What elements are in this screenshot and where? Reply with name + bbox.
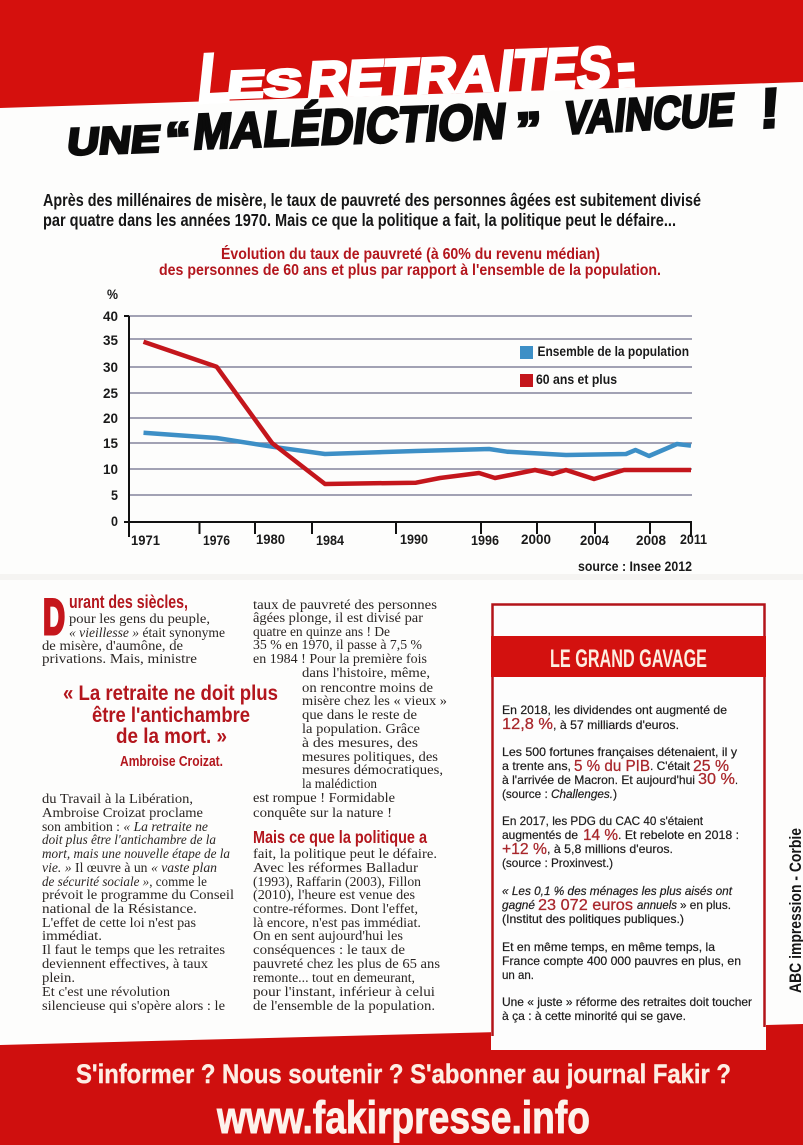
x axis labels	[131, 531, 707, 548]
x axis labels: 2000	[521, 531, 551, 547]
article left column, bottom: silencieuse qui s'opère alors : le	[42, 999, 225, 1014]
y axis labels: 15	[103, 435, 118, 451]
x axis labels: 1980	[256, 531, 285, 547]
article left column, bottom	[42, 792, 234, 1014]
pull quote	[63, 682, 278, 770]
article left column, bottom: Ambroise Croizat proclame	[42, 806, 203, 821]
title line 1	[194, 35, 640, 118]
article right column: contre-réformes. Dont l'effet,	[253, 902, 418, 917]
chart title	[159, 246, 661, 279]
article right column: misère chez les « vieux »	[302, 694, 447, 709]
article left column, top: « vieillesse » était synonyme	[69, 626, 225, 641]
closing paragraph: à ça : à cette minorité qui se gave.	[502, 1009, 686, 1023]
article left column, bottom: doit plus être l'antichambre de la	[42, 833, 216, 848]
article right column: en 1984 ! Pour la première fois	[253, 652, 427, 667]
fortunes paragraph: (source : Challenges.)	[502, 787, 617, 801]
fortunes paragraph: 25 %	[693, 758, 729, 775]
title line 1: RETRA	[305, 44, 500, 108]
article right column: la population. Grâce	[302, 722, 420, 737]
pull quote: « La retraite ne doit plus	[63, 682, 278, 705]
x axis labels: 2011	[680, 531, 707, 547]
article right column: mesures politiques, des	[302, 750, 438, 765]
pull quote: de la mort. »	[116, 725, 227, 748]
article left column, bottom: de sécurité sociale », comme le	[42, 875, 207, 890]
title line 1: :	[612, 47, 640, 97]
article left column, bottom: national de la Résistance.	[42, 902, 197, 917]
article left column, bottom: deviennent effectives, à taux	[42, 957, 208, 972]
y axis labels: 0	[111, 513, 118, 529]
CEO pay paragraph: augmentés de	[502, 828, 578, 842]
chart title: des personnes de 60 ans et plus par rapport à l'ensemble de la population.	[159, 262, 661, 279]
x axis labels: 1996	[471, 532, 499, 548]
footer website: www.fakirpresse.info	[216, 1092, 590, 1143]
y axis labels: 25	[103, 385, 118, 401]
article right column: (1993), Raffarin (2003), Fillon	[253, 875, 421, 890]
legend: Ensemble de la population	[538, 343, 689, 359]
x axis labels: 1984	[316, 532, 344, 548]
line chart	[103, 286, 707, 574]
article left column, bottom: prévoit le programme du Conseil	[42, 888, 234, 903]
article right column: pauvreté chez les plus de 65 ans	[253, 957, 440, 972]
article right column: 35 % en 1970, il passe à 7,5 %	[253, 638, 422, 653]
article right column: quatre en quinze ans ! De	[253, 625, 390, 640]
poverty paragraph: Et en même temps, en même temps, la	[502, 940, 715, 954]
top red banner	[0, 0, 803, 108]
richest households paragraph: 23 072 euros	[538, 897, 633, 914]
title line 1: ES	[225, 61, 304, 107]
richest households paragraph: « Les 0,1 % des ménages les plus aisés ont	[502, 884, 733, 898]
article left column, bottom: immédiat.	[42, 929, 102, 944]
title line 2: ”	[515, 102, 543, 155]
article left column, bottom: son ambition : « La retraite ne	[42, 820, 208, 835]
article left column, top	[42, 592, 225, 667]
chart title: Évolution du taux de pauvreté (à 60% du revenu médian)	[221, 246, 600, 263]
closing paragraph: Une « juste » réforme des retraites doit toucher	[502, 995, 752, 1009]
x axis labels: 2004	[580, 532, 609, 548]
dividends paragraph: 12,8 %	[502, 716, 553, 733]
blue line: ensemble de la population	[144, 433, 691, 456]
pull quote: être l'antichambre	[92, 704, 250, 727]
article right column: Avec les réformes Balladur	[253, 861, 418, 876]
richest households paragraph: (Institut des politiques publiques.)	[502, 912, 684, 926]
fortunes paragraph: 5 % du PIB	[574, 758, 650, 775]
article right column: taux de pauvreté des personnes	[253, 598, 437, 613]
fortunes paragraph: Les 500 fortunes françaises détenaient, il y	[502, 745, 737, 759]
title line 2: MALÉDICTION	[191, 92, 509, 160]
axes and ticks	[124, 316, 692, 537]
article right column: pour l'instant, inférieur à celui	[253, 985, 435, 1000]
poverty paragraph: un an.	[502, 968, 534, 982]
article left column, top: de misère, d'aumône, de	[42, 639, 183, 654]
article left column, bottom: du Travail à la Libération,	[42, 792, 193, 807]
intro text	[43, 190, 701, 230]
intro text: par quatre dans les années 1970. Mais ce que la politique a fait, la politique peut le défaire...	[43, 210, 676, 230]
article left column, bottom: plein.	[42, 971, 75, 986]
CEO pay paragraph: +12 %	[502, 841, 547, 858]
article right column: (2010), l'heure est venue des	[253, 888, 415, 903]
fortunes paragraph: 30 %	[698, 771, 735, 788]
article right column: on rencontre moins de	[302, 681, 433, 696]
article right column: Mais ce que la politique a	[253, 827, 427, 847]
poverty paragraph: France compte 400 000 pauvres en plus, en	[502, 954, 741, 968]
dividends paragraph: En 2018, les dividendes ont augmenté de	[502, 703, 727, 717]
article right column: que dans le reste de	[302, 708, 417, 723]
fortunes paragraph: . C'était	[650, 759, 691, 773]
CEO pay paragraph: , à 5,8 millions d'euros.	[547, 842, 673, 856]
article right column: remonte... tout en demeurant,	[253, 971, 415, 986]
poverty paragraph	[502, 940, 741, 982]
fortunes paragraph: .	[735, 773, 738, 787]
CEO pay paragraph	[502, 814, 739, 870]
article right column: de l'ensemble de la population.	[253, 999, 435, 1014]
article right column: à des mesures, des	[302, 736, 418, 751]
article left column, top: urant des siècles,	[69, 592, 188, 612]
title line 2	[65, 76, 782, 165]
y axis labels	[103, 286, 118, 529]
chart source: source : Insee 2012	[578, 558, 692, 574]
article right column: mesures démocratiques,	[302, 763, 443, 778]
panel heading: LE GRAND GAVAGE	[550, 645, 707, 673]
x axis labels: 2008	[636, 532, 666, 548]
article left column, bottom: Et c'est une révolution	[42, 985, 170, 1000]
richest households paragraph: gagné	[502, 898, 535, 912]
y axis labels: 20	[103, 410, 118, 426]
article left column, bottom: mort, mais une nouvelle étape de la	[42, 847, 230, 862]
richest households paragraph: » en plus.	[680, 898, 731, 912]
closing paragraph	[502, 995, 752, 1023]
bottom red banner	[0, 1024, 803, 1145]
title line 2: “	[164, 112, 192, 165]
title line 2: UNE	[65, 118, 163, 164]
y axis labels: 10	[103, 461, 118, 477]
article right column: âgées plonge, il est divisé par	[253, 611, 423, 626]
article right column: là encore, n'est pas immédiat.	[253, 916, 421, 931]
article left column, top: pour les gens du peuple,	[69, 612, 210, 627]
article left column, bottom: vie. » Il œuvre à un « vaste plan	[42, 861, 217, 876]
article right column: est rompue ! Formidable	[253, 791, 395, 806]
title line 2: !	[758, 76, 782, 140]
article left column, top: privations. Mais, ministre	[42, 652, 197, 667]
y axis labels: %	[107, 286, 118, 302]
article right column: conséquences : le taux de	[253, 943, 405, 958]
panel: le grand gavage	[491, 603, 766, 1050]
title line 1: L	[194, 37, 237, 118]
red line: 60 ans et plus	[144, 342, 691, 484]
CEO pay paragraph: (source : Proxinvest.)	[502, 856, 613, 870]
fortunes paragraph: à l'arrivée de Macron. Et aujourd'hui	[502, 773, 695, 787]
footer call to action: S'informer ? Nous soutenir ? S'abonner au journal Fakir ?	[76, 1059, 731, 1089]
quote attribution: Ambroise Croizat.	[120, 754, 223, 770]
CEO pay paragraph: 14 %	[583, 827, 618, 844]
article right column: dans l'histoire, même,	[302, 666, 430, 681]
article left column, bottom: L'effet de cette loi n'est pas	[42, 916, 196, 931]
article right column: la malédiction	[302, 777, 377, 792]
y axis labels: 5	[111, 487, 118, 503]
legend	[520, 343, 689, 387]
y axis labels: 30	[103, 359, 118, 375]
dividends paragraph: , à 57 milliards d'euros.	[553, 718, 679, 732]
article right column: fait, la politique peut le défaire.	[253, 847, 437, 862]
legend: 60 ans et plus	[536, 371, 617, 387]
dividends paragraph	[502, 703, 727, 733]
CEO pay paragraph: En 2017, les PDG du CAC 40 s'étaient	[502, 814, 704, 828]
article right column: conquête sur la nature !	[253, 806, 392, 821]
article right column: On en sent aujourd'hui les	[253, 929, 403, 944]
fortunes paragraph	[502, 745, 738, 801]
richest households paragraph: annuels	[637, 898, 677, 912]
article left column, bottom: Il faut le temps que les retraites	[42, 943, 225, 958]
fortunes paragraph: a trente ans,	[502, 759, 571, 773]
title line 2: VAINCUE	[562, 83, 737, 144]
richest households paragraph	[502, 884, 733, 926]
y axis labels: 35	[103, 332, 118, 348]
x axis labels: 1971	[131, 532, 160, 548]
CEO pay paragraph: . Et rebelote en 2018 :	[618, 828, 739, 842]
y axis labels: 40	[103, 308, 118, 324]
x axis labels: 1976	[203, 532, 230, 548]
title line 1: ITES	[495, 35, 615, 104]
article right column	[253, 598, 447, 1014]
drop cap: D	[43, 589, 65, 645]
x axis labels: 1990	[400, 531, 428, 547]
